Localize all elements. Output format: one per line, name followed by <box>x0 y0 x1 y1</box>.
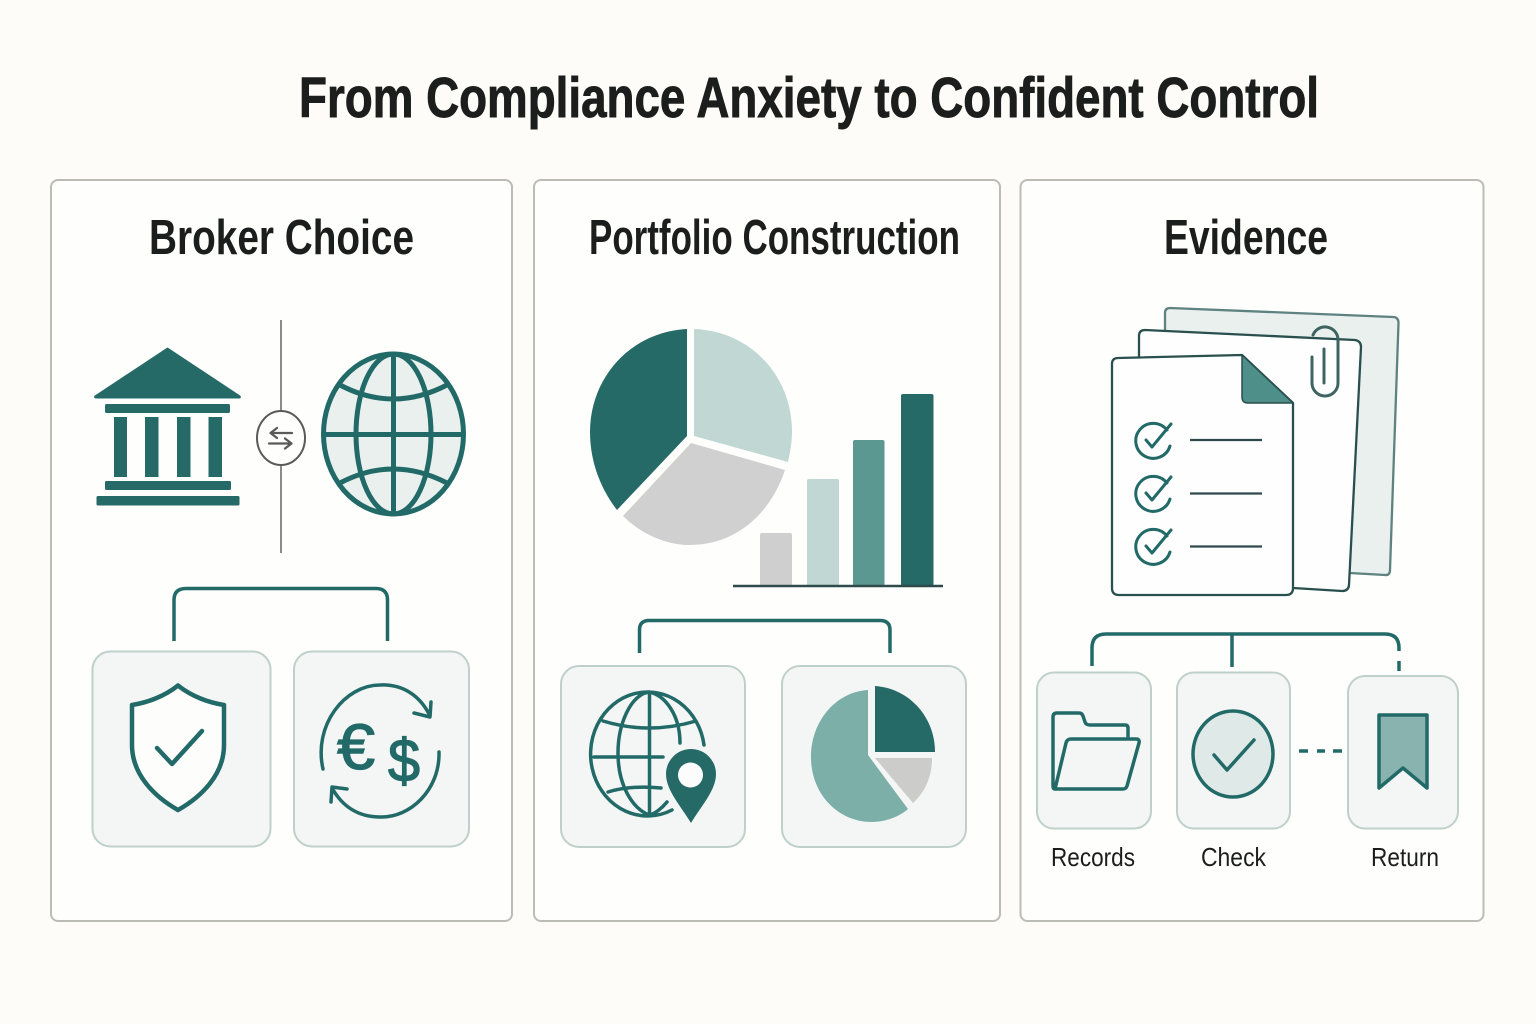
icon: bookmark <box>1379 715 1427 788</box>
panel: broker choice <box>51 180 512 921</box>
paperclip <box>1312 327 1338 396</box>
panel: evidence <box>1020 180 1484 921</box>
label: check: Check <box>1201 842 1267 872</box>
card: check <box>1177 672 1290 872</box>
card: shield <box>92 652 270 846</box>
icon: globe <box>324 354 464 514</box>
icon: currency exchange: $ <box>388 727 420 794</box>
icon: globe with pin <box>591 692 716 823</box>
heading: portfolio construction: Portfolio Construction <box>589 211 960 265</box>
connector <box>640 620 890 653</box>
card: return <box>1348 676 1458 872</box>
divider with exchange symbol <box>257 320 305 553</box>
icon: document stack <box>1112 308 1398 595</box>
heading: evidence: Evidence <box>1164 211 1328 265</box>
icon: allocation pie <box>811 686 935 822</box>
icon: folder <box>1053 713 1139 789</box>
connector <box>1092 634 1399 671</box>
card: allocation pie <box>782 666 966 847</box>
title: From Compliance Anxiety to Confident Control <box>299 66 1319 130</box>
front sheet <box>1112 355 1293 595</box>
label: records: Records <box>1051 842 1135 872</box>
page fold <box>1242 355 1293 403</box>
card: records <box>1037 672 1151 872</box>
checklist <box>1136 423 1262 564</box>
back sheet <box>1165 308 1398 575</box>
icon: currency exchange <box>321 685 439 817</box>
icon: currency exchange: € <box>337 711 375 783</box>
panel: portfolio construction <box>534 180 1000 921</box>
connector <box>174 588 388 641</box>
icon: bank <box>95 348 240 506</box>
label: return: Return <box>1371 842 1439 872</box>
middle sheet <box>1139 330 1361 591</box>
dashed link <box>1299 749 1342 753</box>
card: currency exchange <box>294 652 469 846</box>
icon: check circle <box>1193 711 1273 797</box>
heading: broker choice: Broker Choice <box>149 211 414 265</box>
icon: shield with check <box>132 686 224 810</box>
pie chart <box>590 329 792 545</box>
card: global location <box>561 666 745 847</box>
bar chart <box>733 394 943 586</box>
